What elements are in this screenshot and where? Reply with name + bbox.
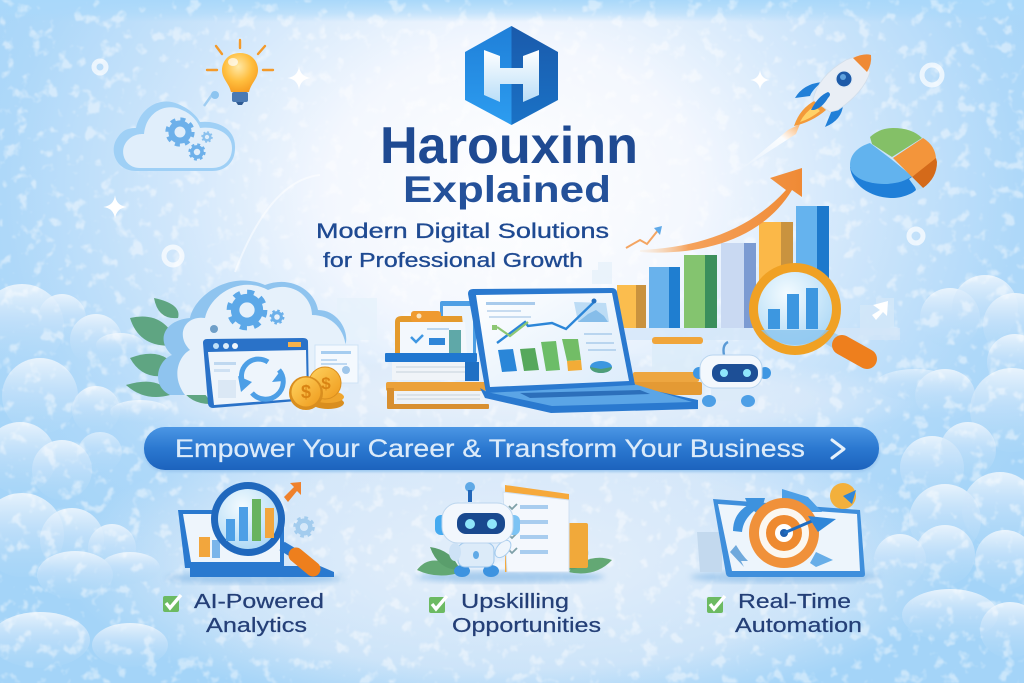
label: Real-Time — [738, 591, 851, 613]
dashboard lines — [486, 298, 609, 343]
feature: Upskilling Opportunities — [415, 482, 612, 637]
label — [429, 591, 601, 637]
bar 4 — [721, 243, 756, 328]
feature: AI-Powered Analytics — [163, 482, 345, 637]
tablet — [440, 301, 476, 357]
label — [707, 591, 862, 637]
illustration: laptop with dashboard — [468, 288, 698, 413]
banner — [144, 427, 880, 472]
icon: cloud with gears — [114, 91, 235, 171]
icon: light bulb — [207, 40, 273, 105]
icon: gold coins: $ — [321, 374, 331, 393]
icon: chevron — [832, 440, 844, 458]
subtitle: for Professional Growth — [323, 250, 583, 272]
leaves — [126, 298, 210, 404]
bar 3 — [684, 255, 717, 328]
icon: small robot — [693, 342, 771, 407]
illustration: coin stack — [633, 337, 703, 395]
label: Upskilling — [461, 591, 569, 613]
icon: pie chart — [850, 128, 937, 198]
icon: magnifier over chart — [749, 263, 867, 359]
illustration: paper sheet — [315, 345, 358, 383]
logo: hexagon H — [465, 26, 558, 125]
illustration: cloud with gears — [126, 280, 346, 404]
bar chart with growth arrow — [600, 168, 900, 340]
icon: robot with checklist — [415, 482, 612, 583]
bar 2 — [649, 267, 680, 328]
illustration: clipboard on books — [385, 301, 489, 409]
icon: gold coins — [289, 367, 344, 410]
icon: gold coins: $ — [301, 382, 311, 402]
bar 6 — [796, 206, 829, 328]
growth arrow — [626, 168, 802, 253]
label: AI-Powered — [194, 591, 324, 613]
subtitle — [316, 220, 609, 272]
label: Opportunities — [452, 615, 601, 637]
label: Automation — [735, 615, 862, 637]
clipboard — [395, 311, 467, 354]
icon: target with arrows — [690, 483, 880, 583]
title: Harouxinn — [380, 117, 638, 175]
illustration: browser window — [203, 338, 309, 408]
feature: Real-Time Automation — [690, 483, 880, 637]
banner: Empower Your Career & Transform Your Business — [175, 435, 805, 463]
subtitle: Modern Digital Solutions — [316, 220, 609, 243]
label — [163, 591, 324, 637]
icon: rocket — [740, 54, 871, 170]
bar 5 — [759, 222, 793, 328]
label: Analytics — [206, 615, 307, 637]
top book — [385, 353, 479, 381]
dashboard bars — [498, 334, 616, 373]
bottom book — [386, 382, 489, 409]
bar 1 — [617, 285, 646, 328]
title: Explained — [403, 169, 611, 210]
title — [380, 117, 638, 210]
icon: laptop with magnifier — [165, 482, 345, 584]
